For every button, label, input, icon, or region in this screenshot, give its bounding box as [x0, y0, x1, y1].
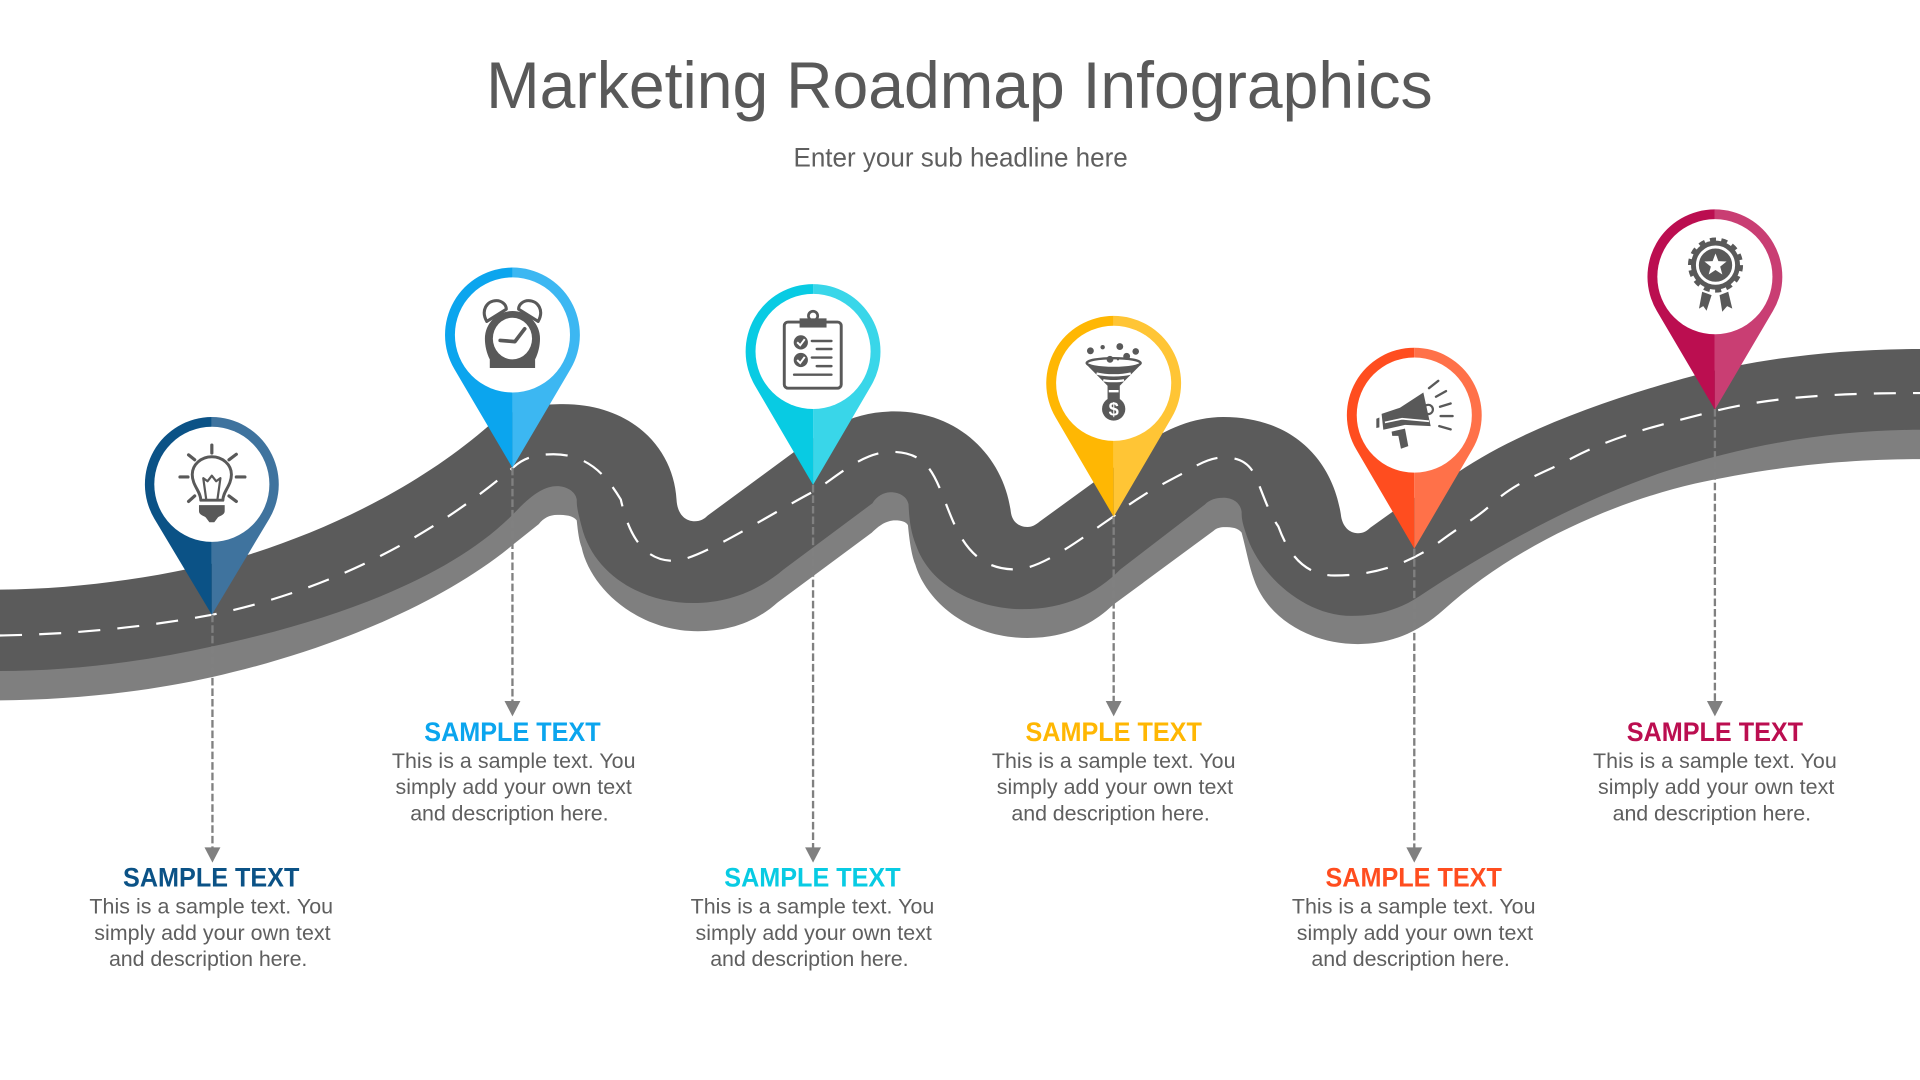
connector arrow: step 3 — [805, 485, 821, 863]
pin 6: award ribbon — [1647, 209, 1782, 410]
step 6 description — [1593, 749, 1837, 825]
road: lower side band — [0, 393, 1920, 700]
step 4 description: and description here. — [1011, 801, 1210, 825]
step 5 description — [1292, 894, 1536, 971]
step 3 description: This is a sample text. You — [691, 894, 934, 918]
step 6 description: and description here. — [1613, 801, 1811, 825]
text block: step 5 — [1292, 863, 1536, 971]
icon: alarm clock — [484, 301, 541, 368]
road: centre line — [0, 393, 1920, 636]
text block: step 6 — [1593, 717, 1837, 825]
step 4 description: This is a sample text. You — [992, 749, 1236, 773]
road — [0, 349, 1920, 700]
step 4 description: simply add your own text — [997, 775, 1233, 799]
step 2 description: and description here. — [410, 801, 609, 825]
step 3 description: simply add your own text — [696, 921, 932, 945]
step 2 description: simply add your own text — [396, 775, 632, 799]
text block: step 2 — [392, 717, 636, 825]
icon: megaphone — [1376, 381, 1453, 449]
step 1 description: simply add your own text — [94, 921, 331, 945]
connector arrow: step 1 — [204, 615, 220, 863]
step 1 description — [89, 894, 333, 971]
step 1 heading: SAMPLE TEXT — [123, 863, 300, 893]
pin 1: lightbulb — [145, 417, 279, 615]
step 3 description: and description here. — [710, 947, 909, 971]
text block: step 4 — [992, 717, 1236, 825]
icon: lightbulb — [180, 445, 245, 522]
step 6 description: This is a sample text. You — [1593, 749, 1837, 773]
connector arrow: step 6 — [1707, 409, 1723, 716]
step 5 description: and description here. — [1311, 947, 1510, 971]
icon: sales funnel: $ — [1109, 399, 1119, 420]
step 6 description: simply add your own text — [1598, 775, 1834, 799]
connector arrow: step 4 — [1106, 517, 1122, 716]
icon: sales funnel — [1086, 343, 1142, 421]
step 2 heading: SAMPLE TEXT — [424, 717, 601, 747]
step 3 description — [691, 894, 934, 971]
step 2 description — [392, 749, 636, 825]
icon: clipboard checklist — [784, 311, 841, 388]
step 1 description: This is a sample text. You — [89, 894, 333, 918]
subtitle: Enter your sub headline here — [793, 143, 1128, 173]
connector arrow: step 2 — [504, 468, 520, 716]
step 5 heading: SAMPLE TEXT — [1326, 863, 1502, 893]
step 1 description: and description here. — [109, 947, 307, 971]
pin 2: alarm clock — [445, 268, 580, 468]
step 4 description — [992, 749, 1236, 825]
pin 5: megaphone — [1347, 348, 1482, 549]
step 6 heading: SAMPLE TEXT — [1627, 717, 1804, 747]
step 3 heading: SAMPLE TEXT — [724, 863, 901, 893]
pin 3: checklist — [746, 284, 880, 485]
icon: award rosette — [1690, 239, 1741, 312]
text block: step 3 — [691, 863, 934, 971]
step 5 description: simply add your own text — [1297, 921, 1533, 945]
step 2 description: This is a sample text. You — [392, 749, 636, 773]
step 4 heading: SAMPLE TEXT — [1026, 717, 1202, 747]
road: dark surface — [0, 349, 1920, 671]
step 5 description: This is a sample text. You — [1292, 894, 1536, 918]
text block: step 1 — [89, 863, 333, 971]
pin 4: sales funnel — [1046, 316, 1181, 517]
title: Marketing Roadmap Infographics — [486, 49, 1433, 123]
connector arrow: step 5 — [1406, 549, 1422, 863]
